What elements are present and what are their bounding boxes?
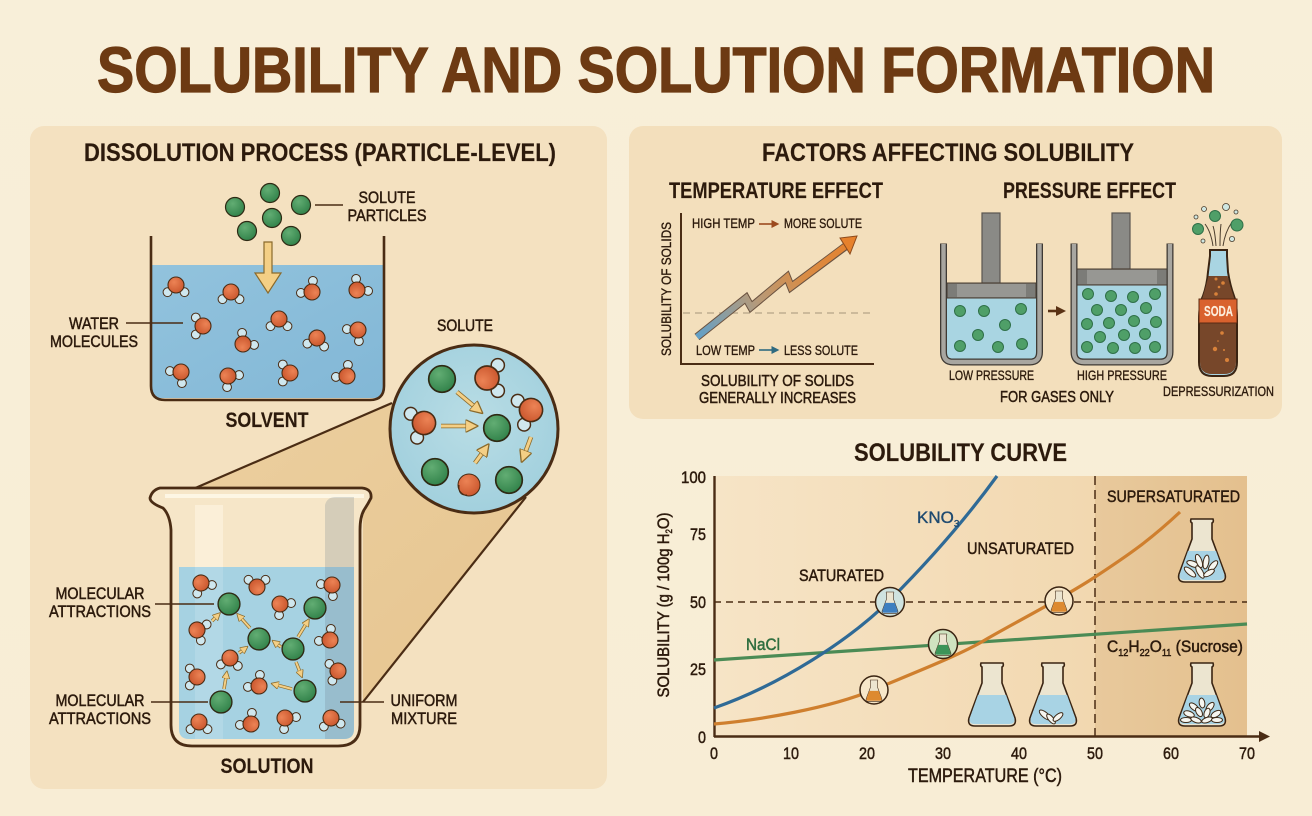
label: sucrose: 12 [1118, 648, 1129, 659]
label: solution: SOLUTION [220, 755, 314, 778]
panel: dissolution process [30, 126, 607, 789]
label: unsaturated: UNSATURATED [967, 539, 1074, 558]
label: sucrose: (Sucrose) [1171, 637, 1243, 656]
magnified circle [390, 345, 558, 513]
high pressure cylinder [1074, 213, 1170, 362]
fizz [1192, 204, 1243, 246]
label: molecular attractions lower: ATTRACTIONS [49, 710, 151, 728]
curve: sucrose [714, 512, 1180, 724]
label: solute zoom: SOLUTE [437, 317, 493, 335]
label: sucrose: H [1128, 637, 1140, 656]
y axis title: 2 [664, 529, 674, 533]
badge: green flask [928, 630, 958, 658]
label: low pressure: LOW PRESSURE [949, 367, 1034, 383]
heading: factors: FACTORS AFFECTING SOLUBILITY [762, 139, 1134, 167]
badge: orange flask lower [860, 676, 888, 704]
x tick labels: 10 [783, 744, 799, 763]
label: solvent: SOLVENT [226, 409, 309, 432]
label: molecular attractions upper: ATTRACTIONS [49, 603, 151, 621]
solvent beaker [151, 236, 384, 400]
label: high temp: MORE SOLUTE [784, 215, 862, 231]
x axis title: TEMPERATURE (°C) [908, 766, 1062, 787]
label: water molecules: WATER [69, 315, 119, 333]
arrow: solute drops into solvent [255, 242, 281, 293]
x tick labels: 0 [710, 744, 718, 763]
label: KNO3: 3 [954, 519, 960, 530]
gas particles low [954, 304, 1028, 352]
label: solute particles: PARTICLES [348, 207, 426, 225]
label: molecular attractions upper: MOLECULAR [56, 585, 145, 603]
x tick labels: 30 [935, 744, 951, 763]
solute particles [226, 184, 310, 246]
label: sucrose: O [1150, 637, 1162, 656]
label: solute particles: SOLUTE [358, 189, 416, 207]
solution water molecules [185, 570, 348, 739]
temperature chart [658, 213, 874, 407]
zigzag trend arrow [697, 236, 857, 337]
flask: supersaturated crystals [1179, 519, 1225, 582]
label: high pressure: HIGH PRESSURE [1077, 367, 1167, 383]
label: NaCl: NaCl [746, 635, 780, 654]
label: sucrose: C [1107, 637, 1119, 656]
caption: solids [699, 373, 856, 407]
water molecules [163, 273, 374, 393]
arrow: pressure increase [1048, 310, 1058, 312]
label: KNO3: KNO [917, 508, 954, 527]
heading: temperature effect: TEMPERATURE EFFECT [669, 178, 883, 203]
label: low temp: LOW TEMP [696, 342, 755, 358]
x tick labels [710, 744, 1255, 763]
label: low temp: LESS SOLUTE [784, 342, 858, 358]
low pressure cylinder [944, 213, 1040, 362]
temperature chart: SOLUBILITY OF SOLIDS [658, 222, 674, 356]
label: molecular attractions upper [49, 585, 214, 621]
label: uniform mixture [340, 692, 458, 728]
solution beaker [150, 488, 371, 746]
heading: solubility curve: SOLUBILITY CURVE [854, 439, 1067, 467]
label: uniform mixture: UNIFORM [390, 692, 458, 710]
label: low temp [696, 342, 858, 358]
y axis title: SOLUBILITY (g / 100g H [654, 511, 673, 698]
flask: few crystals [1030, 663, 1076, 726]
heading: dissolution process: DISSOLUTION PROCESS (PARTICLE-LEVEL) [84, 139, 556, 167]
attraction arrows [441, 392, 531, 463]
label: supersaturated: SUPERSATURATED [1107, 487, 1240, 506]
label: uniform mixture: MIXTURE [391, 710, 457, 728]
label: sucrose: 11 [1162, 648, 1172, 659]
soda label text: SODA [1204, 304, 1233, 320]
x tick labels: 70 [1239, 744, 1255, 763]
x tick labels: 40 [1011, 744, 1027, 763]
heading: pressure effect: PRESSURE EFFECT [1003, 178, 1176, 203]
y tick labels: 75 [690, 525, 706, 544]
label: molecular attractions lower: MOLECULAR [56, 692, 145, 710]
label: water molecules: MOLECULES [50, 333, 138, 351]
flask: crowded crystals [1179, 663, 1225, 726]
y tick labels: 50 [690, 593, 706, 612]
curve: NaCl [714, 624, 1247, 660]
label: depressurization: DEPRESSURIZATION [1163, 383, 1274, 399]
magnifier cone [193, 403, 526, 702]
x tick labels: 60 [1163, 744, 1179, 763]
x tick labels: 50 [1087, 744, 1103, 763]
y axis title: O) [654, 512, 673, 529]
caption: solids: SOLUBILITY OF SOLIDS [701, 373, 854, 390]
badge: blue flask [876, 588, 904, 616]
label: high temp: HIGH TEMP [692, 215, 755, 231]
label: solute particles [315, 189, 426, 225]
label: for gases only: FOR GASES ONLY [1000, 389, 1114, 406]
label: saturated: SATURATED [799, 566, 884, 585]
small attraction arrows [212, 617, 306, 689]
y tick labels [681, 468, 706, 747]
gas particles high [1082, 288, 1162, 354]
chart: solubility curve [654, 468, 1270, 787]
label: high temp [692, 215, 862, 231]
y tick labels: 100 [681, 468, 706, 487]
y tick labels: 0 [698, 728, 706, 747]
axes [714, 476, 1270, 742]
solution solute particles [210, 593, 326, 713]
soda bottle [1192, 204, 1243, 376]
caption: solids: GENERALLY INCREASES [699, 390, 856, 407]
label: molecular attractions lower [49, 692, 208, 728]
panel: factors affecting solubility [629, 126, 1282, 419]
label: sucrose: 22 [1140, 648, 1150, 659]
badge: orange flask saturated [1045, 587, 1073, 615]
y tick labels: 25 [690, 660, 706, 679]
label: water molecules [50, 315, 183, 351]
curve: KNO3 [714, 476, 997, 708]
flask: unsaturated [969, 663, 1015, 726]
x tick labels: 20 [859, 744, 875, 763]
